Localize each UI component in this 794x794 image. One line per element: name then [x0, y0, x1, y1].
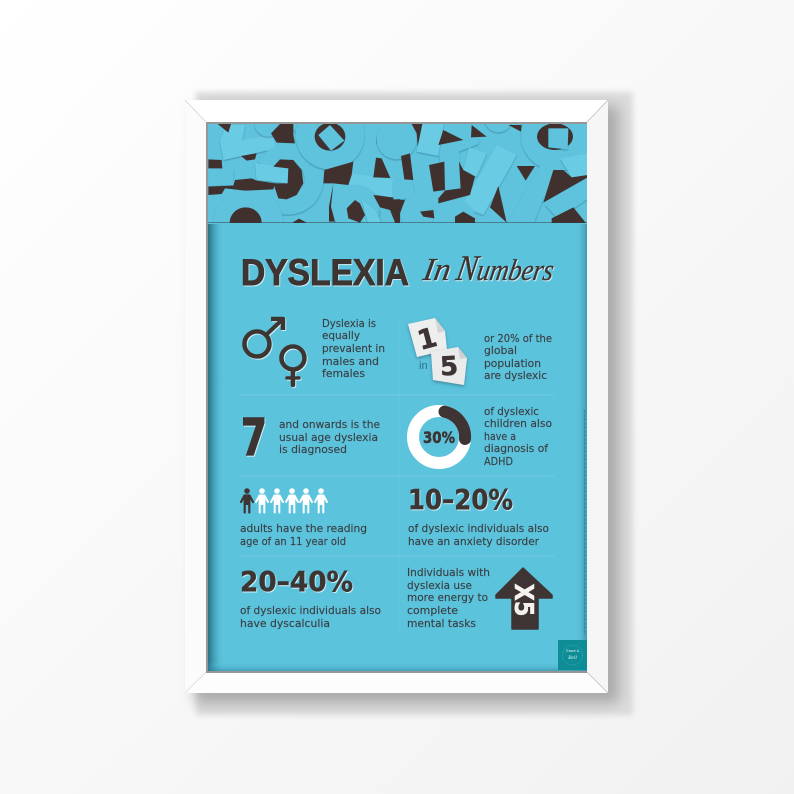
icon: up arrow with x5: X5: [508, 584, 538, 616]
text: dyscalculia: have dyscalculia: [240, 617, 330, 630]
stat: 20-40%: 20–40%: [240, 566, 353, 598]
logo badge: [558, 640, 587, 670]
text: adult reading age: age of an 11 year old: [240, 535, 346, 548]
text: age of diagnosis: usual age dyslexia: [279, 431, 378, 444]
text: more energy: more energy to: [407, 591, 488, 604]
icon: 1 in 5 paper tiles: in: [419, 360, 428, 372]
text: equally prevalent: Dyslexia is: [322, 317, 376, 330]
logo badge: Grace &: [566, 649, 580, 653]
icon: up arrow with x5: [496, 568, 552, 629]
text: anxiety disorder: have an anxiety disorder: [408, 535, 539, 548]
text: age of diagnosis: and onwards is the: [279, 418, 380, 431]
vertical fine print strip: [584, 410, 586, 635]
text: ADHD diagnosis: ADHD: [484, 455, 513, 468]
text: more energy: Individuals with: [407, 566, 490, 579]
text: ADHD diagnosis: of dyslexic: [484, 405, 539, 418]
panel edge shading: [208, 224, 587, 671]
text: anxiety disorder: of dyslexic individuals also: [408, 522, 549, 535]
text: dyscalculia: of dyslexic individuals also: [240, 604, 381, 617]
blue poster panel: [208, 124, 587, 671]
script subtitle: In Numbers: [420, 248, 558, 288]
header: pile of paper letters: [208, 124, 587, 223]
text: equally prevalent: males and: [322, 355, 379, 368]
text: ADHD diagnosis: children also: [484, 417, 552, 430]
text: anxiety disorder: [408, 522, 549, 548]
text: age of diagnosis: is diagnosed: [279, 443, 347, 456]
text: dyscalculia: [240, 604, 381, 630]
text: more energy: dyslexia use: [407, 579, 472, 592]
text: equally prevalent: equally: [322, 329, 360, 342]
text: 20 percent of global population: are dyslexic: [484, 369, 547, 382]
icon: male and female symbols: [244, 319, 304, 385]
text: equally prevalent: prevalent in: [322, 342, 385, 355]
frame shadow: [195, 92, 633, 715]
text: 20 percent of global population: [484, 332, 552, 382]
heading: DYSLEXIA: DYSLEXIA: [241, 251, 409, 293]
text: ADHD diagnosis: [484, 405, 552, 468]
logo badge: Bell: [568, 655, 577, 661]
text: age of diagnosis: [279, 418, 380, 456]
text: equally prevalent: females: [322, 367, 365, 380]
stat: 10-20%: 10–20%: [408, 484, 513, 516]
text: adult reading age: [240, 522, 367, 548]
chart: 30 percent donut: [413, 411, 465, 463]
text: 20 percent of global population: population: [484, 357, 541, 370]
text: more energy: [407, 566, 490, 630]
text: more energy: mental tasks: [407, 617, 476, 630]
text: ADHD diagnosis: diagnosis of: [484, 442, 549, 455]
text: equally prevalent: [322, 317, 385, 380]
icon: 1 in 5 paper tiles: 5: [439, 352, 459, 382]
text: more energy: complete: [407, 604, 458, 617]
text: 20 percent of global population: or 20% of the: [484, 332, 552, 345]
icon: 1 in 5 paper tiles: [408, 318, 467, 385]
cell dividers: [240, 320, 554, 630]
text: ADHD diagnosis: have a: [484, 430, 516, 443]
script subtitle: In Numbers: Numbers: [453, 248, 558, 288]
icon: row of six people, one dark: [241, 488, 327, 512]
text: adult reading age: adults have the reading: [240, 522, 367, 535]
big number: 7: 7: [241, 409, 267, 468]
icon: 1 in 5 paper tiles: 1: [414, 322, 440, 357]
script subtitle: In Numbers: In: [420, 251, 454, 287]
white picture frame: [185, 100, 608, 693]
text: 20 percent of global population: global: [484, 344, 517, 357]
chart: 30 percent donut: 30%: [423, 428, 455, 447]
